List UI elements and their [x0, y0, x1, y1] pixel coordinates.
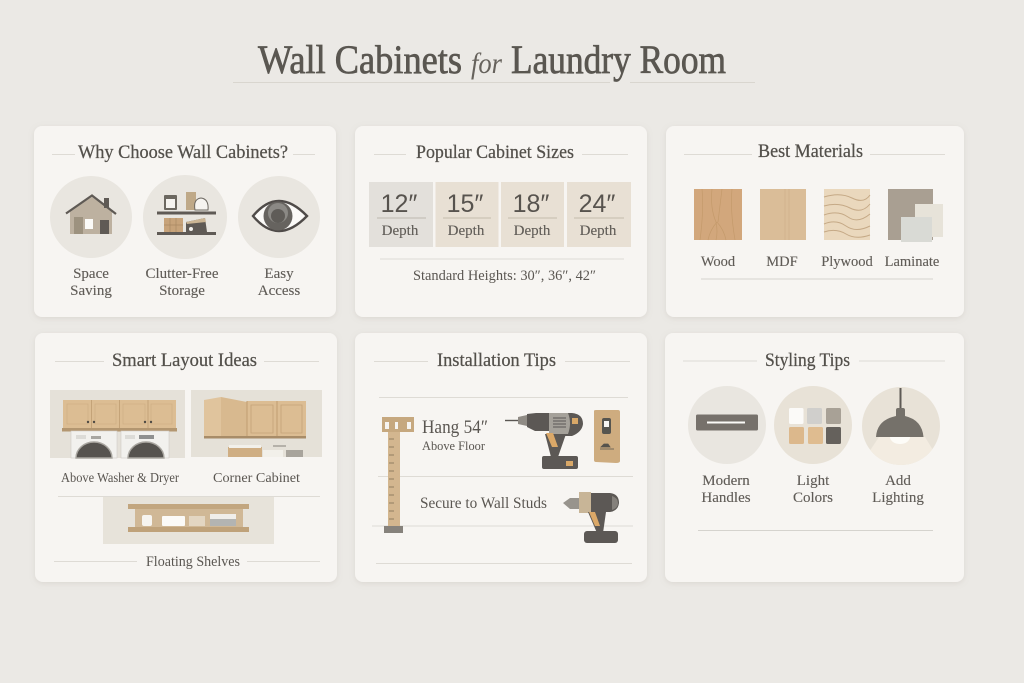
text: hang 54 inches above floor [422, 417, 488, 453]
icon: modern handle [688, 386, 766, 464]
heading: best materials: Best Materials [758, 141, 863, 162]
label: light colors: Light [797, 473, 829, 489]
label: clutter-free storage: Storage [159, 283, 205, 299]
icon: eye [238, 176, 320, 258]
size tile: 18 inch [501, 182, 564, 247]
label: wood: Wood [701, 254, 736, 270]
label: clutter-free storage: Clutter-Free [145, 266, 219, 282]
size tile: 15 inch: Depth [448, 223, 485, 239]
text: secure to wall studs: Secure to Wall Studs [420, 495, 547, 512]
size tile: 24 inch: Depth [580, 223, 617, 239]
size tile: 18 inch: Depth [514, 223, 551, 239]
icon: measuring ruler [382, 417, 414, 533]
swatch: laminate [888, 189, 943, 242]
title [233, 37, 755, 82]
label: space saving: Space [73, 266, 109, 282]
label: above washer and dryer: Above Washer & Dryer [61, 470, 179, 485]
label: space saving: Saving [70, 283, 112, 299]
panel: best materials [666, 126, 964, 317]
note: standard heights: Standard Heights: 30″, 36″, 42″ [413, 268, 596, 284]
text: hang 54 inches above floor: Above Floor [422, 438, 486, 453]
panel: popular cabinet sizes [355, 126, 647, 317]
label: modern handles: Modern [702, 473, 750, 489]
label: corner cabinet: Corner Cabinet [213, 471, 300, 486]
illustration: cabinets above washer and dryer [50, 390, 185, 458]
label: light colors: Colors [793, 490, 833, 506]
title: Wall Cabinets [258, 37, 462, 82]
size tile: 12 inch [369, 182, 433, 247]
size tile: 12 inch: Depth [382, 223, 419, 239]
icon: stud finder [594, 410, 620, 463]
panel: why choose wall cabinets [34, 126, 336, 317]
swatch: mdf [760, 189, 806, 240]
heading: smart layout ideas: Smart Layout Ideas [112, 350, 257, 371]
illustration: floating shelves [103, 497, 274, 544]
title: Laundry Room [511, 37, 726, 82]
swatch: wood [694, 189, 742, 240]
title: for [471, 47, 502, 80]
text: hang 54 inches above floor: Hang 54″ [422, 417, 488, 438]
size tile: 12 inch: 12″ [381, 190, 417, 218]
size tile: 24 inch: 24″ [579, 190, 615, 218]
label: easy access: Access [258, 283, 300, 299]
size tile: 15 inch: 15″ [447, 190, 483, 218]
panel: installation tips [355, 333, 647, 582]
icon: house [50, 176, 132, 258]
size tile: 18 inch: 18″ [513, 190, 549, 218]
label: laminate: Laminate [885, 254, 939, 270]
icon: large power drill [505, 413, 583, 469]
label: add lighting: Add [885, 473, 911, 489]
label: plywood: Plywood [821, 254, 874, 270]
swatch: plywood [824, 189, 870, 240]
icon: compact drill [563, 492, 619, 543]
heading: why choose wall cabinets: Why Choose Wall Cabinets? [78, 142, 288, 163]
label: add lighting: Lighting [872, 490, 924, 506]
panel: smart layout ideas [35, 333, 337, 582]
heading: popular cabinet sizes: Popular Cabinet Sizes [416, 142, 574, 163]
label: clutter-free storage [145, 266, 219, 299]
icon: colour swatches [774, 386, 852, 464]
heading: installation tips: Installation Tips [437, 350, 556, 371]
icon: clutter-free storage shelves [143, 175, 227, 259]
label: floating shelves: Floating Shelves [146, 554, 240, 570]
icon: pendant lamp [862, 387, 940, 465]
panel: styling tips [665, 333, 964, 582]
label: easy access: Easy [264, 266, 294, 282]
label: modern handles: Handles [701, 490, 751, 506]
size tile: 15 inch [436, 182, 498, 247]
label: mdf: MDF [766, 254, 798, 270]
heading: styling tips: Styling Tips [765, 350, 850, 371]
illustration: corner cabinet [191, 390, 322, 457]
size tile: 24 inch [567, 182, 631, 247]
